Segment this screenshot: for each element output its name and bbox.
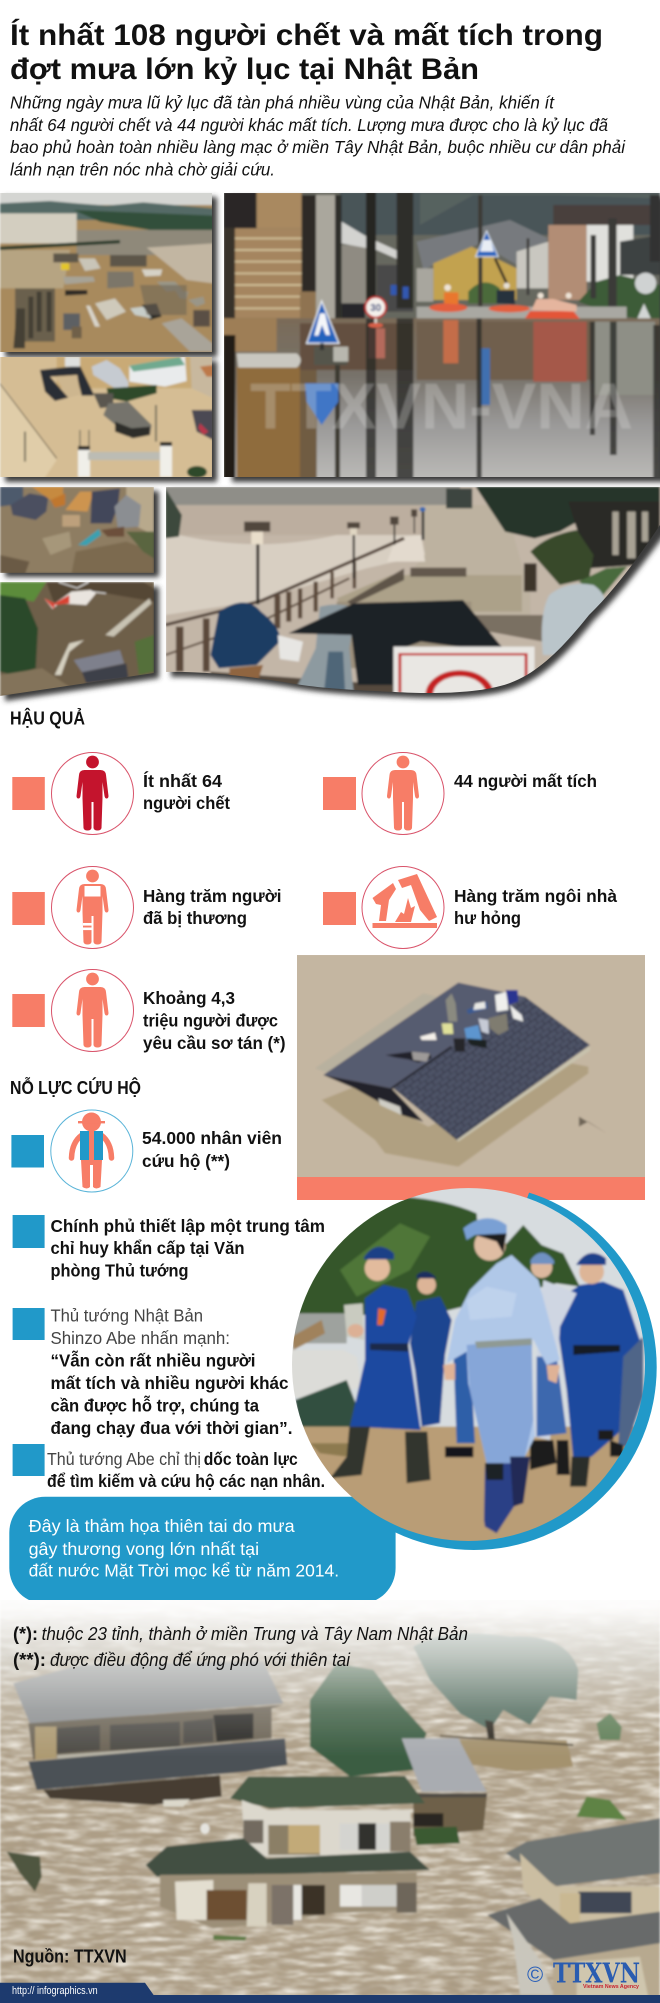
item: 64 dead: Ít nhất 64 bbox=[143, 770, 222, 791]
footer bar with URL bbox=[0, 1983, 660, 2003]
photo: landslide damaged houses bbox=[0, 487, 154, 573]
footer bar with URL: http:// infographics.vn bbox=[12, 1985, 98, 1997]
bullet: Abe quote: Thủ tướng Nhật Bản bbox=[50, 1306, 203, 1326]
watermark: TTXVN-VNA bbox=[250, 370, 633, 442]
intro text: bao phủ hoàn toàn nhiều làng mạc ở miền Tây Nhật Bản, buộc nhiều cư dân phải bbox=[10, 137, 626, 157]
footnotes bbox=[13, 1624, 468, 1670]
photo: PM Abe with rescue workers bbox=[290, 1187, 650, 1547]
bullet: Abe quote: đang chạy đua với thời gian”. bbox=[50, 1418, 292, 1438]
section heading: NỖ LỰC CỨU HỘ: NỖ LỰC CỨU HỘ bbox=[10, 1077, 141, 1098]
item: 4.3 million evacuated: triệu người được bbox=[143, 1010, 278, 1030]
title bbox=[10, 18, 603, 86]
photo: helicopter over landslide bbox=[0, 582, 154, 697]
item: hundreds of houses damaged: hư hỏng bbox=[454, 908, 521, 928]
item: 54,000 rescuers: 54.000 nhân viên bbox=[142, 1128, 282, 1148]
item: hundreds injured: Hàng trăm người bbox=[143, 886, 282, 906]
item: hundreds of houses damaged: Hàng trăm ngôi nhà bbox=[454, 886, 617, 906]
salmon bar bbox=[297, 1177, 645, 1200]
bullet: all-out search order: dốc toàn lực bbox=[204, 1449, 298, 1469]
bullet: all-out search order: để tìm kiếm và cứu hộ các nạn nhân. bbox=[47, 1471, 325, 1491]
bullet: emergency command: phòng Thủ tướng bbox=[50, 1260, 188, 1280]
item: 44 missing: 44 người mất tích bbox=[454, 771, 597, 791]
item: 54,000 rescuers bbox=[11, 1110, 282, 1192]
item: hundreds injured: đã bị thương bbox=[143, 908, 247, 928]
photo: rescue rafts on flooded street: 30 bbox=[370, 303, 382, 314]
TTXVN logo: Vietnam News Agency bbox=[583, 1984, 640, 1990]
callout: deadliest disaster since 2014: đất nước Mặt Trời mọc kể từ năm 2014. bbox=[29, 1561, 339, 1581]
item: 4.3 million evacuated: Khoảng 4,3 bbox=[143, 988, 235, 1008]
footnotes: được điều động để ứng phó với thiên tai bbox=[50, 1650, 351, 1670]
photo: flooded buildings bbox=[0, 357, 212, 477]
bullet: Abe quote: Shinzo Abe nhấn mạnh: bbox=[50, 1328, 230, 1348]
intro text bbox=[10, 92, 626, 180]
source: Nguồn: TTXVN bbox=[13, 1947, 127, 1967]
bullet: all-out search order bbox=[13, 1444, 325, 1491]
intro text: nhất 64 người chết và 44 người khác mất tích. Lượng mưa được cho là kỷ lục đã bbox=[10, 115, 608, 135]
item: hundreds injured bbox=[12, 866, 282, 948]
photo: people on a roof bbox=[295, 953, 648, 1180]
callout: deadliest disaster since 2014 bbox=[9, 1497, 396, 1604]
callout: deadliest disaster since 2014: Đây là thảm họa thiên tai do mưa bbox=[29, 1516, 295, 1536]
bullet: emergency command bbox=[13, 1215, 325, 1280]
TTXVN logo bbox=[527, 1959, 640, 1990]
footnotes: (*): bbox=[13, 1624, 38, 1644]
section heading: HẬU QUẢ: HẬU QUẢ bbox=[10, 708, 85, 728]
title: Ít nhất 108 người chết và mất tích trong bbox=[10, 18, 603, 52]
footnotes: thuộc 23 tỉnh, thành ở miền Trung và Tây Nam Nhật Bản bbox=[42, 1624, 468, 1644]
bullet: all-out search order: Thủ tướng Abe chỉ thị bbox=[47, 1449, 201, 1469]
bullet: Abe quote: mất tích và nhiều người khác bbox=[50, 1373, 289, 1393]
item: 64 dead bbox=[12, 752, 230, 834]
bullet: emergency command: Chính phủ thiết lập một trung tâm bbox=[50, 1216, 325, 1236]
photo shadows bbox=[5, 197, 660, 701]
photo: rescue rafts on flooded street bbox=[223, 192, 660, 482]
item: 4.3 million evacuated: yêu cầu sơ tán (*) bbox=[143, 1033, 286, 1053]
callout: deadliest disaster since 2014: gây thương vong lớn nhất tại bbox=[29, 1539, 259, 1559]
TTXVN logo: © bbox=[527, 1962, 543, 1987]
item: 64 dead: người chết bbox=[143, 793, 230, 813]
item: 44 missing bbox=[323, 752, 597, 834]
TTXVN logo: TTXVN bbox=[553, 1959, 640, 1990]
item: 4.3 million evacuated bbox=[12, 970, 286, 1053]
intro text: lánh nạn trên nóc nhà chờ giải cứu. bbox=[10, 160, 275, 180]
bullet: Abe quote: “Vẫn còn rất nhiều người bbox=[50, 1350, 256, 1370]
bullet: emergency command: chỉ huy khẩn cấp tại Văn bbox=[50, 1238, 244, 1258]
bullet: Abe quote: cần được hỗ trợ, chúng ta bbox=[50, 1394, 259, 1416]
teal ring behind leader photo bbox=[394, 1192, 657, 1550]
intro text: Những ngày mưa lũ kỷ lục đã tàn phá nhiều vùng của Nhật Bản, khiến ít bbox=[10, 92, 555, 112]
photo: aerial flooded town bbox=[0, 192, 213, 355]
photo: flooded river with onlookers bbox=[166, 487, 660, 693]
title: đợt mưa lớn kỷ lục tại Nhật Bản bbox=[10, 53, 479, 86]
item: 54,000 rescuers: cứu hộ (**) bbox=[142, 1151, 230, 1171]
footnotes: (**): bbox=[13, 1650, 46, 1670]
bullet: Abe quote bbox=[13, 1306, 292, 1438]
photo: houses in flood torrent bbox=[0, 1590, 660, 2003]
item: hundreds of houses damaged bbox=[323, 866, 617, 948]
